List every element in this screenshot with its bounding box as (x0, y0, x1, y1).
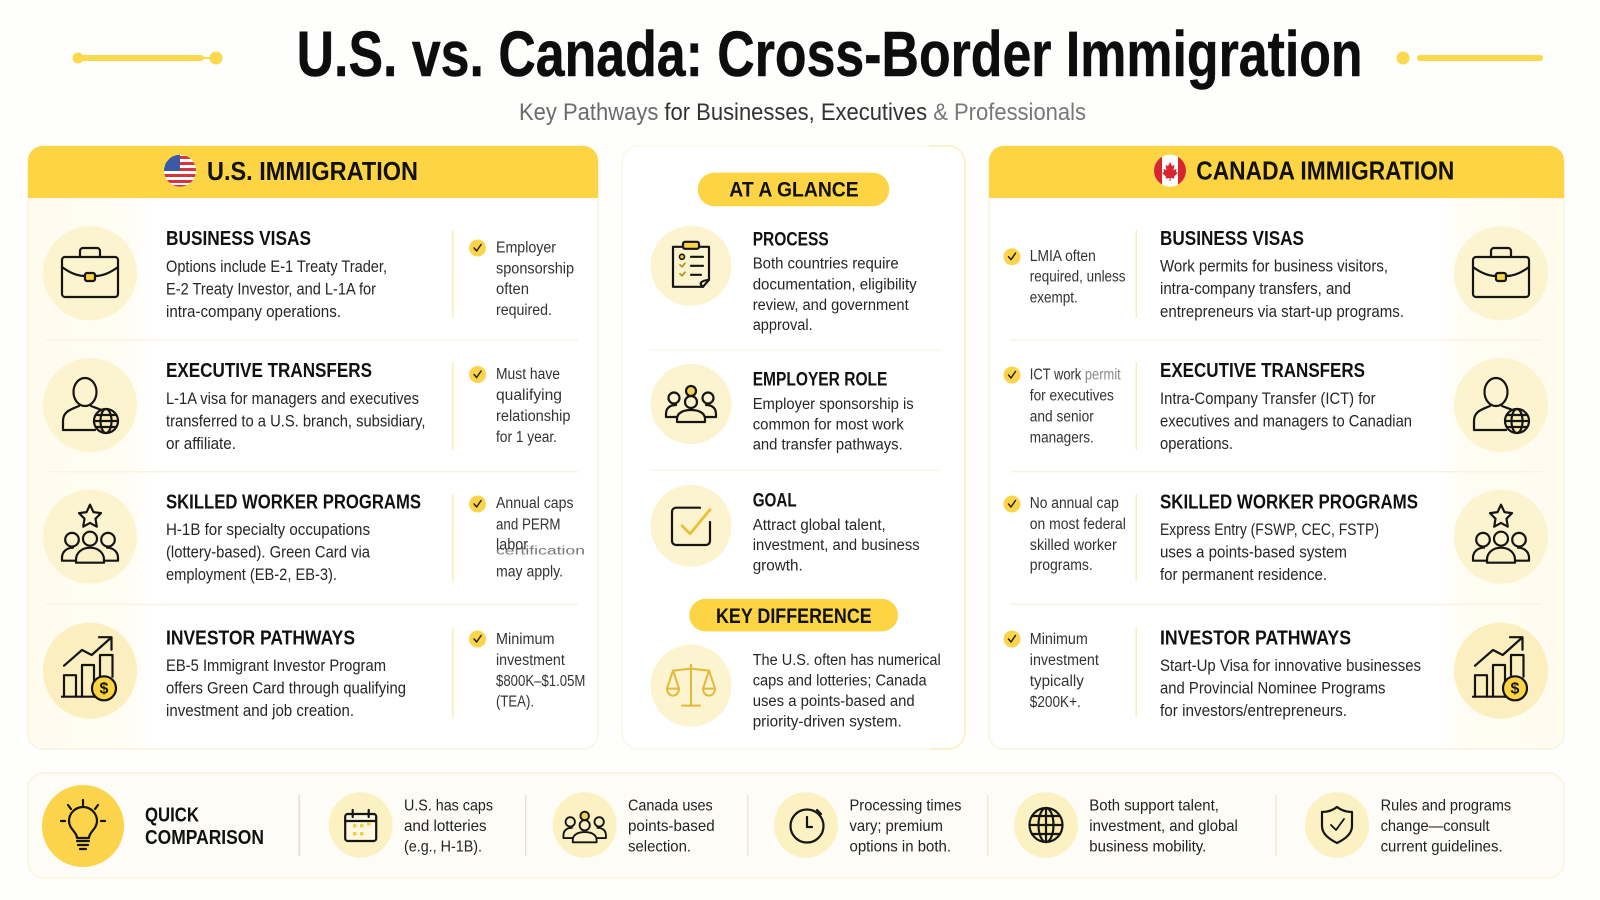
text: investment, and global (1089, 818, 1238, 835)
header text: U.S. immigration: U.S. IMMIGRATION (207, 156, 418, 186)
icon: growth chart (1454, 623, 1548, 719)
text: Rules and programs (1381, 798, 1511, 815)
icon: shield (1305, 792, 1369, 858)
text (628, 798, 715, 856)
note (1004, 495, 1126, 574)
note: investment (496, 652, 565, 669)
description: The U.S. often has numerical (753, 652, 941, 669)
note: and senior (1030, 409, 1094, 426)
note: Must have (496, 366, 560, 383)
description (753, 652, 941, 731)
text: (e.g., H-1B). (404, 839, 482, 856)
note (469, 239, 574, 319)
icon: growth chart: $ (1511, 680, 1520, 698)
description: operations. (1160, 435, 1233, 453)
description: for investors/entrepreneurs. (1160, 702, 1347, 720)
heading: GOAL (753, 490, 797, 512)
note (469, 366, 570, 446)
description: intra-company operations. (166, 303, 341, 321)
icon: checklist clipboard (650, 226, 732, 306)
icon: check box (650, 485, 732, 567)
icon: light bulb (42, 785, 124, 867)
note: Annual caps (496, 495, 574, 512)
icon: Canada flag (1154, 154, 1186, 187)
description: transferred to a U.S. branch, subsidiary, (166, 413, 426, 431)
text: vary; premium (850, 818, 943, 835)
description: offers Green Card through qualifying (166, 680, 406, 698)
description: common for most work (753, 416, 904, 433)
description: Employer sponsorship is (753, 396, 914, 413)
row: Canada investor pathways (1004, 623, 1548, 720)
description: Options include E-1 Treaty Trader, (166, 258, 387, 276)
description: intra-company transfers, and (1160, 280, 1351, 298)
description (166, 258, 387, 321)
note: $800K–$1.05M (496, 673, 585, 690)
heading: EXECUTIVE TRANSFERS (166, 359, 372, 382)
badge: key difference (689, 599, 898, 631)
description: investment and job creation. (166, 702, 354, 720)
description (1160, 521, 1379, 584)
text (850, 798, 962, 856)
description (1160, 258, 1404, 321)
text: current guidelines. (1381, 839, 1503, 856)
note: for 1 year. (496, 429, 557, 446)
description: caps and lotteries; Canada (753, 673, 927, 690)
description (1160, 657, 1421, 720)
description: Intra-Company Transfer (ICT) for (1160, 390, 1376, 408)
icon: person with globe (1454, 358, 1548, 452)
row: Canada executive transfers (1004, 358, 1548, 453)
icon: team with star (1454, 490, 1548, 584)
note: Employer (496, 239, 556, 256)
description: documentation, eligibility (753, 276, 917, 294)
heading: INVESTOR PATHWAYS (1160, 626, 1351, 649)
item: key difference (650, 645, 941, 731)
description: Start-Up Visa for innovative businesses (1160, 657, 1421, 675)
heading: BUSINESS VISAS (1160, 227, 1304, 250)
description (1160, 390, 1412, 453)
note: $200K+. (1030, 694, 1081, 711)
text (1381, 798, 1511, 856)
panel header: Canada (989, 146, 1564, 198)
icon: U.S. flag (164, 154, 196, 188)
icon: clock (774, 792, 838, 858)
text (404, 798, 493, 856)
icon: person with globe (43, 358, 137, 452)
note: required. (496, 302, 552, 319)
heading: EXECUTIVE TRANSFERS (1160, 359, 1365, 382)
text: points-based (628, 818, 715, 835)
panel: at a glance (622, 146, 965, 749)
description: review, and government (753, 297, 909, 314)
note (1004, 248, 1126, 306)
item: employer role (650, 364, 914, 453)
note: often (496, 281, 529, 298)
description (166, 390, 426, 453)
icon: growth chart: $ (100, 680, 109, 698)
note: programs. (1030, 557, 1093, 574)
description: Express Entry (FSWP, CEC, FSTP) (1160, 521, 1379, 539)
description: Work permits for business visitors, (1160, 258, 1388, 276)
icon: calendar (329, 792, 393, 858)
panel header: U.S. (28, 146, 598, 198)
row: U.S. business visas (43, 226, 574, 321)
description: employment (EB-2, EB-3). (166, 566, 337, 584)
description (753, 256, 917, 334)
description (166, 521, 371, 584)
note: LMIA often (1030, 248, 1096, 265)
title: U.S. vs. Canada: Cross-Border Immigration (297, 18, 1363, 90)
decorative line: right (1396, 52, 1543, 64)
row: U.S. skilled worker programs (43, 490, 585, 584)
subtitle: Key Pathways for Businesses, Executives & Professionals (519, 99, 1086, 126)
text: Processing times (850, 798, 962, 815)
text: and lotteries (404, 818, 487, 835)
badge: at a glance (698, 173, 889, 206)
panel: Canada immigration (989, 146, 1564, 749)
panel: quick comparison (28, 773, 1564, 878)
heading: SKILLED WORKER PROGRAMS (1160, 490, 1418, 513)
decorative line: left (72, 52, 222, 64)
description: L-1A visa for managers and executives (166, 390, 419, 408)
description: uses a points-based and (753, 693, 915, 710)
text: U.S. has caps (404, 798, 493, 815)
panel: U.S. immigration (28, 146, 598, 749)
description (166, 657, 406, 720)
note: ICT work permit (1030, 366, 1121, 383)
heading: SKILLED WORKER PROGRAMS (166, 490, 421, 513)
description: executives and managers to Canadian (1160, 413, 1412, 431)
note: investment (1030, 652, 1099, 669)
description: for permanent residence. (1160, 566, 1327, 584)
note: and PERM (496, 516, 560, 533)
note: sponsorship (496, 260, 574, 277)
description: growth. (753, 558, 803, 575)
row: Canada business visas (1004, 226, 1548, 321)
description: Attract global talent, (753, 517, 886, 534)
description: approval. (753, 317, 813, 334)
note: Minimum (1030, 631, 1088, 648)
description: EB-5 Immigrant Investor Program (166, 657, 386, 675)
heading: PROCESS (753, 229, 829, 250)
note: labor (496, 536, 528, 553)
row: U.S. executive transfers (43, 358, 570, 453)
icon: team with star (43, 490, 137, 584)
note: certification (496, 546, 585, 558)
description: entrepreneurs via start-up programs. (1160, 303, 1404, 321)
description: E-2 Treaty Investor, and L-1A for (166, 280, 376, 298)
description: priority-driven system. (753, 714, 902, 731)
description: uses a points-based system (1160, 544, 1347, 562)
row: U.S. investor pathways (43, 623, 585, 720)
note: on most federal (1030, 516, 1126, 533)
badge: key difference: KEY DIFFERENCE (716, 605, 872, 628)
note: relationship (496, 408, 570, 425)
item: caps and lotteries (329, 792, 493, 858)
heading: quick comparison: QUICK (145, 804, 199, 827)
icon: briefcase (43, 226, 137, 320)
description: H-1B for specialty occupations (166, 521, 370, 539)
text: business mobility. (1089, 839, 1206, 856)
description: Both countries require (753, 256, 899, 273)
header text: Canada immigration: CANADA IMMIGRATION (1196, 156, 1454, 186)
text (1089, 798, 1238, 856)
note: typically (1030, 673, 1084, 690)
heading: quick comparison (145, 804, 264, 849)
item: goal (650, 485, 920, 575)
note: No annual cap (1030, 495, 1119, 512)
note: required, unless (1030, 269, 1126, 286)
description: (lottery-based). Green Card via (166, 544, 371, 562)
note: (TEA). (496, 694, 534, 711)
note: may apply. (496, 564, 563, 581)
note: managers. (1030, 430, 1094, 447)
item: process (650, 226, 917, 334)
description (753, 396, 914, 453)
text: Canada uses (628, 798, 713, 815)
note (469, 495, 585, 581)
item: processing times (774, 792, 962, 858)
heading: quick comparison: COMPARISON (145, 826, 264, 849)
note (1004, 366, 1121, 447)
description: and transfer pathways. (753, 436, 903, 453)
description (753, 517, 920, 575)
text: selection. (628, 839, 691, 856)
row: Canada skilled worker programs (1004, 490, 1548, 584)
badge: at a glance: AT A GLANCE (729, 178, 859, 201)
note: qualifying (496, 387, 562, 404)
text: options in both. (850, 839, 951, 856)
heading: BUSINESS VISAS (166, 227, 311, 250)
note (1004, 630, 1099, 711)
description: and Provincial Nominee Programs (1160, 680, 1386, 698)
heading: EMPLOYER ROLE (753, 370, 887, 390)
item: global mobility (1014, 792, 1238, 858)
icon: people group (650, 364, 732, 444)
icon: growth chart (43, 623, 137, 719)
note (469, 630, 585, 711)
note: exempt. (1030, 289, 1078, 306)
description: investment, and business (753, 537, 920, 554)
heading: INVESTOR PATHWAYS (166, 626, 355, 649)
item: consult guidelines (1305, 792, 1511, 858)
icon: briefcase (1454, 226, 1548, 320)
text: change—consult (1381, 818, 1490, 835)
icon: people group (553, 792, 617, 858)
note: skilled worker (1030, 537, 1117, 554)
icon: scales (650, 645, 732, 727)
note: Minimum (496, 631, 554, 648)
note: for executives (1030, 388, 1114, 405)
description: or affiliate. (166, 435, 236, 453)
item: points-based (553, 792, 715, 858)
icon: globe (1014, 792, 1078, 858)
text: Both support talent, (1089, 798, 1219, 815)
